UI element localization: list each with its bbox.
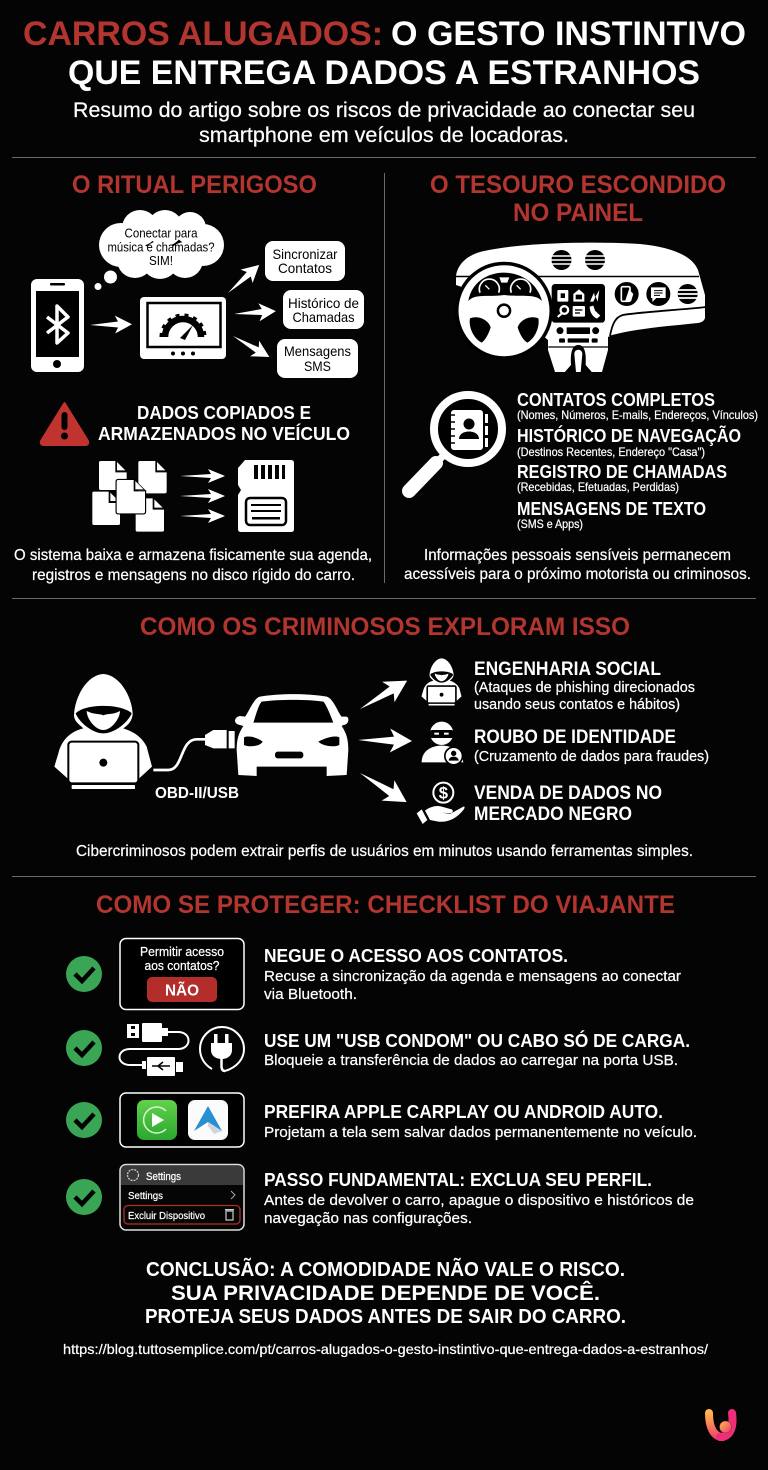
box: historico de chamadas: [283, 290, 364, 329]
conclusion: PROTEJA SEUS DADOS ANTES DE SAIR DO CARRO.: [145, 1306, 626, 1328]
box: mensagens sms: [277, 339, 358, 378]
list: stolen data types: (SMS e Apps): [517, 517, 583, 531]
text: negue o acesso: NEGUE O ACESSO AOS CONTATOS.: [264, 946, 568, 966]
text: prefira carplay: Projetam a tela sem salvar dados permanentemente no veículo.: [264, 1124, 697, 1141]
icon: head unit with gauge: [140, 297, 226, 359]
title: QUE ENTREGA DADOS A ESTRANHOS: [68, 54, 700, 92]
subtitle: [73, 99, 695, 147]
text: usb condom: USE UM "USB CONDOM" OU CABO SÓ DE CARGA.: [264, 1030, 690, 1051]
arrow: to identity theft: [358, 728, 412, 753]
thought bubble: [94, 210, 224, 290]
arrows: files to card: [180, 469, 225, 523]
subtitle: Resumo do artigo sobre os riscos de privacidade ao conectar seu: [73, 99, 695, 122]
text: informacoes pessoais: [404, 547, 751, 583]
panel: o ritual perigoso: [14, 171, 372, 584]
icon: car front: [235, 694, 348, 776]
text: informacoes pessoais: Informações pessoais sensíveis permanecem: [424, 547, 731, 564]
icon: stack of files: [92, 461, 167, 532]
text: passo fundamental: PASSO FUNDAMENTAL: EXCLUA SEU PERFIL.: [264, 1170, 652, 1190]
icon: money in hand: [417, 783, 465, 824]
panel: checklist: [66, 891, 697, 1230]
thought bubble: Conectar para: [124, 226, 198, 240]
text: informacoes pessoais: acessíveis para o próximo motorista ou criminosos.: [404, 566, 751, 583]
text: engenharia social: ENGENHARIA SOCIAL: [474, 659, 661, 680]
icon: magnifier over address book: [409, 395, 502, 491]
text: venda de dados: [474, 783, 662, 825]
text: venda de dados: VENDA DE DADOS NO: [474, 783, 662, 804]
box: sincronizar contatos: [265, 241, 345, 281]
conclusion: [145, 1258, 626, 1328]
text: engenharia social: (Ataques de phishing direcionados: [474, 680, 695, 696]
panel: o tesouro escondido: [404, 171, 758, 583]
list: stolen data types: HISTÓRICO DE NAVEGAÇÃO: [517, 425, 741, 446]
arrow: to messages: [228, 328, 274, 365]
card: settings screen: Settings: [146, 1171, 181, 1183]
wheel details: [468, 273, 542, 343]
icon: cable and plug: [153, 730, 235, 770]
card: permitir acesso: Permitir acesso: [140, 945, 224, 959]
card: settings screen: Excluir Dispositivo: [128, 1210, 205, 1222]
arrow: to black market: [354, 763, 413, 812]
list: stolen data types: (Destinos Recentes, Endereço "Casa"): [517, 445, 705, 459]
icon: hooded hacker with laptop: [54, 674, 152, 789]
text: venda de dados: MERCADO NEGRO: [474, 804, 632, 825]
text: passo fundamental: navegação nas configurações.: [264, 1210, 472, 1227]
text: usb condom: Bloqueie a transferência de dados ao carregar na porta USB.: [264, 1052, 678, 1069]
vents: [551, 250, 606, 270]
icon: masked thief: [422, 722, 463, 766]
icon: warning triangle: [41, 403, 88, 445]
text: negue o acesso: Recuse a sincronização da agenda e mensagens ao conectar: [264, 968, 681, 985]
heading: o ritual perigoso: O RITUAL PERIGOSO: [72, 171, 317, 199]
box: sincronizar contatos: Contatos: [278, 260, 332, 276]
heading: dados copiados: [98, 402, 350, 444]
icon: money in hand: $: [439, 784, 449, 803]
subtitle: smartphone em veículos de locadoras.: [199, 124, 569, 147]
card: carplay and android auto: [120, 1093, 244, 1147]
conclusion: CONCLUSÃO: A COMODIDADE NÃO VALE O RISCO.: [146, 1258, 625, 1281]
card: settings screen: [120, 1164, 244, 1230]
text: prefira carplay: [264, 1102, 697, 1141]
icon: memory card: [238, 460, 294, 532]
heading: dados copiados: ARMAZENADOS NO VEÍCULO: [98, 423, 350, 444]
text: sistema baixa: registros e mensagens no disco rígido do carro.: [32, 567, 355, 584]
text: negue o acesso: [264, 946, 681, 1003]
text: prefira carplay: PREFIRA APPLE CARPLAY OU ANDROID AUTO.: [264, 1102, 663, 1122]
icon: check 1: [66, 956, 102, 992]
box: sincronizar contatos: Sincronizar: [272, 246, 338, 262]
heading: como se proteger: COMO SE PROTEGER: CHECKLIST DO VIAJANTE: [96, 891, 675, 919]
heading: o tesouro escondido: O TESOURO ESCONDIDO: [430, 171, 726, 199]
list: stolen data types: [517, 390, 758, 531]
label: obd-ii/usb: OBD-II/USB: [155, 785, 239, 802]
card: permitir acesso: aos contatos?: [144, 959, 220, 973]
text: roubo de identidade: (Cruzamento de dados para fraudes): [474, 749, 709, 765]
icon: check 2: [66, 1030, 102, 1066]
text: sistema baixa: [14, 547, 372, 584]
arrow: phone to head unit: [90, 315, 132, 334]
card: permitir acesso: [120, 938, 244, 1010]
box: historico de chamadas: Histórico de: [288, 295, 359, 311]
text: roubo de identidade: ROUBO DE IDENTIDADE: [474, 727, 676, 748]
arrow: to call history: [233, 302, 277, 323]
icon: phone with bluetooth: [31, 279, 84, 372]
list: stolen data types: MENSAGENS DE TEXTO: [517, 499, 706, 519]
card: settings screen: Settings: [128, 1190, 163, 1202]
arrow: to social engineering: [354, 670, 413, 719]
arrow: to contacts: [222, 258, 265, 300]
heading: como os criminosos: COMO OS CRIMINOSOS EXPLORAM ISSO: [140, 613, 630, 641]
list: stolen data types: CONTATOS COMPLETOS: [517, 390, 715, 410]
heading: dados copiados: DADOS COPIADOS E: [137, 402, 311, 423]
box: mensagens sms: SMS: [304, 358, 331, 374]
list: stolen data types: (Recebidas, Efetuadas, Perdidas): [517, 480, 679, 494]
text: passo fundamental: Antes de devolver o carro, apague o dispositivo e históricos de: [264, 1192, 694, 1209]
heading: o tesouro escondido: NO PAINEL: [513, 199, 643, 227]
icon: check 3: [66, 1102, 102, 1138]
heading: o tesouro escondido: [430, 171, 726, 227]
thought bubble: SIM!: [149, 254, 173, 268]
text: negue o acesso: via Bluetooth.: [264, 986, 357, 1003]
text: cibercriminosos: Cibercriminosos podem extrair perfis de usuários em minutos usando ferramentas simples.: [76, 843, 693, 860]
card: permitir acesso: NÃO: [165, 980, 199, 1000]
console and screen: [548, 282, 698, 373]
source url: https://blog.tuttosemplice.com/pt/carros-alugados-o-gesto-instintivo-que-entrega-dados-a-estranhos/: [63, 1341, 708, 1357]
text: engenharia social: [474, 659, 695, 713]
title: CARROS ALUGADOS:: [23, 15, 383, 53]
text: engenharia social: usando seus contatos e hábitos): [474, 697, 680, 713]
icon: check 4: [66, 1179, 102, 1215]
panel: como os criminosos exploram: [54, 613, 709, 860]
text: passo fundamental: [264, 1170, 694, 1227]
icon: usb cable and plug: [120, 1023, 244, 1076]
text: sistema baixa: O sistema baixa e armazena fisicamente sua agenda,: [14, 547, 372, 564]
title: O GESTO INSTINTIVO: [391, 15, 746, 53]
thought bubble: música e chamadas?: [108, 240, 215, 254]
box: historico de chamadas: Chamadas: [292, 309, 354, 325]
logo: [709, 1413, 732, 1437]
list: stolen data types: REGISTRO DE CHAMADAS: [517, 462, 727, 482]
icon: car dashboard: [455, 243, 706, 373]
icon: small hacker: [421, 658, 462, 705]
box: mensagens sms: Mensagens: [284, 343, 351, 359]
text: roubo de identidade: [474, 727, 709, 765]
title: [23, 15, 746, 92]
text: usb condom: [264, 1030, 690, 1069]
conclusion: SUA PRIVACIDADE DEPENDE DE VOCÊ.: [171, 1281, 600, 1305]
